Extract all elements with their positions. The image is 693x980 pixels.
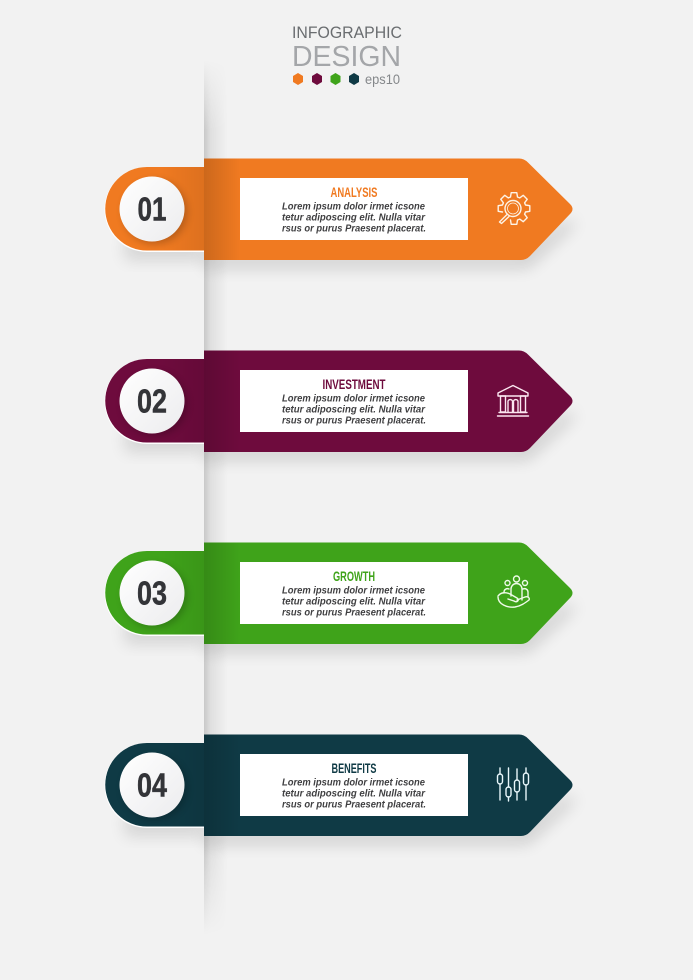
text box: [240, 754, 468, 816]
panel: 02 investment: [105, 350, 578, 460]
vertical fold shadow: [204, 74, 220, 918]
number tab: [105, 743, 204, 828]
text box: [240, 178, 468, 240]
body text: [282, 584, 426, 618]
body text: tetur adiposcing elit. Nulla vitar: [282, 788, 426, 800]
number disc: 03: [137, 574, 167, 612]
panel: 03 growth: [105, 542, 578, 652]
icon: people in hand: [498, 576, 529, 607]
body text: Lorem ipsum dolor irmet icsone: [282, 584, 425, 596]
heading: ANALYSIS: [330, 184, 378, 200]
panel: 01 analysis: [105, 158, 578, 268]
number tab: [105, 359, 204, 444]
panel: 04 benefits: [105, 734, 578, 844]
shadows: [125, 222, 578, 268]
body text: rsus or purus Praesent placerat.: [282, 222, 426, 234]
body text: tetur adiposcing elit. Nulla vitar: [282, 212, 426, 224]
arrow banner: [204, 350, 572, 452]
shadows: [125, 414, 578, 460]
icon: sliders: [498, 768, 528, 801]
shadows: [125, 798, 578, 844]
number disc: [120, 752, 187, 820]
heading: BENEFITS: [332, 760, 376, 776]
colour dots: [293, 73, 359, 85]
body text: rsus or purus Praesent placerat.: [282, 606, 426, 618]
body text: [282, 776, 426, 810]
body text: [282, 392, 426, 426]
icon: gear with magnifier: [498, 193, 530, 224]
text box: [240, 562, 468, 624]
heading: INVESTMENT: [322, 376, 386, 392]
body text: rsus or purus Praesent placerat.: [282, 798, 426, 810]
number disc: [120, 560, 187, 628]
heading: GROWTH: [333, 568, 375, 584]
title: infographic: INFOGRAPHIC: [292, 24, 402, 42]
number disc: 01: [138, 190, 166, 228]
number disc: 02: [137, 382, 167, 420]
number disc: 04: [137, 766, 168, 804]
body text: rsus or purus Praesent placerat.: [282, 414, 426, 426]
body text: Lorem ipsum dolor irmet icsone: [282, 200, 425, 212]
body text: tetur adiposcing elit. Nulla vitar: [282, 404, 426, 416]
arrow banner: [204, 158, 572, 260]
arrow banner: [204, 734, 572, 836]
number tab: [105, 167, 204, 252]
arrow banner: [204, 542, 572, 644]
icon: bank building: [498, 386, 528, 416]
number disc: [120, 368, 187, 436]
body text: tetur adiposcing elit. Nulla vitar: [282, 596, 426, 608]
number tab: [105, 551, 204, 636]
title logo: [292, 24, 402, 87]
body text: [282, 200, 426, 234]
title: design: DESIGN: [292, 41, 401, 73]
body text: Lorem ipsum dolor irmet icsone: [282, 776, 425, 788]
number disc: [120, 176, 187, 244]
body text: Lorem ipsum dolor irmet icsone: [282, 392, 425, 404]
eps10 label: eps10: [365, 71, 400, 87]
shadows: [125, 606, 578, 652]
text box: [240, 370, 468, 432]
